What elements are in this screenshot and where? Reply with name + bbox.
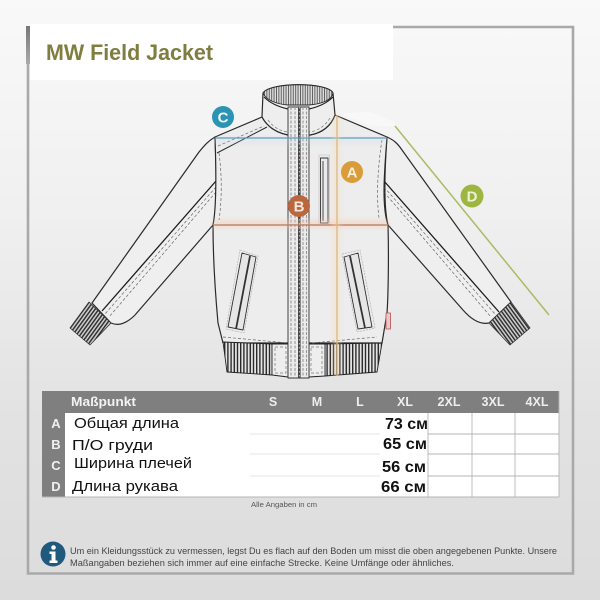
centre zipper placket: [288, 107, 309, 378]
badge D: [460, 184, 484, 208]
row letter column: [42, 413, 65, 497]
badge D: D: [467, 188, 478, 206]
table header bar: L: [356, 395, 364, 409]
info note: Maßangaben beziehen sich immer auf eine einfache Strecke. Keine Umfänge oder ähnliches.: [70, 558, 454, 568]
row letter column: B: [51, 437, 61, 452]
left lower pocket: [226, 250, 258, 333]
right lower pocket: [342, 250, 375, 332]
measure line B: [213, 220, 388, 228]
jacket technical drawing: [70, 85, 530, 378]
left cuff: [70, 302, 111, 345]
table header bar: Maßpunkt: [71, 395, 137, 409]
badge C: C: [218, 110, 229, 126]
table header bar: 4XL: [526, 395, 549, 409]
badge B: B: [294, 198, 305, 216]
armhole and hem dashes: [219, 140, 382, 343]
table background: [42, 391, 559, 497]
XL values: 66 см: [381, 479, 426, 496]
XL values: 65 см: [383, 436, 427, 453]
info note: Um ein Kleidungsstück zu vermessen, legst Du es flach auf den Boden um misst die oben angegebenen Punkte. Unsere: [70, 546, 557, 556]
measure line A: [333, 115, 340, 376]
size table: [42, 391, 559, 497]
table header bar: S: [269, 395, 277, 409]
red side label: [386, 313, 390, 329]
XL values: 56 см: [382, 459, 426, 476]
left sleeve: [92, 137, 216, 324]
badge A: A: [347, 164, 358, 182]
shoulder erase patch: [343, 112, 395, 126]
right sleeve: [384, 137, 511, 323]
table header bar: M: [312, 395, 322, 409]
right cuff: [489, 302, 530, 345]
table header bar: XL: [397, 395, 413, 409]
info icon: [40, 542, 66, 566]
table header bar: [42, 391, 559, 413]
row letter column: C: [51, 458, 61, 473]
row labels: Ширина плечей: [74, 456, 192, 472]
row labels: П/О груди: [72, 438, 153, 454]
measure line D: [395, 126, 549, 315]
row labels: [72, 416, 192, 495]
chest pocket: [319, 155, 330, 225]
collar: [262, 85, 335, 135]
left yoke seam: [217, 126, 267, 153]
badge A: [341, 161, 363, 183]
bottom ribbing: [223, 342, 382, 377]
row labels: Длина рукава: [72, 479, 179, 495]
title banner: [30, 24, 393, 80]
XL values: 73 см: [385, 416, 428, 433]
XL values: [381, 416, 428, 496]
jacket body: [213, 115, 388, 343]
measure line C: [215, 138, 387, 144]
table footnote: Alle Angaben in cm: [251, 502, 317, 509]
badge C: [212, 106, 234, 128]
row letter column: A: [51, 416, 61, 431]
title banner: MW Field Jacket: [46, 40, 214, 65]
table header bar: 3XL: [482, 395, 505, 409]
table header bar: 2XL: [438, 395, 461, 409]
row labels: Общая длина: [74, 416, 180, 432]
badge B: [288, 195, 310, 217]
info note: [70, 546, 557, 568]
row letter column: D: [51, 479, 61, 494]
